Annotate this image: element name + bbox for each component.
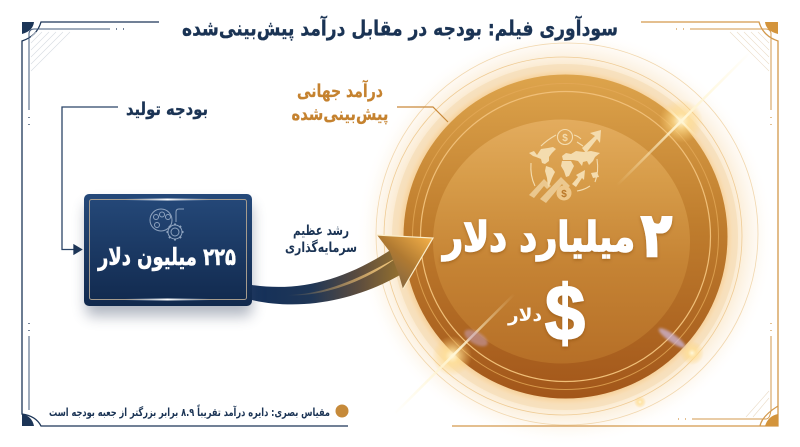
footnote	[49, 404, 348, 419]
legend dot	[336, 404, 348, 418]
outer rings	[376, 43, 758, 425]
australia	[591, 172, 599, 178]
flare bottom spark	[634, 396, 646, 408]
growth arrow small	[572, 170, 585, 187]
revenue amount	[441, 200, 672, 271]
africa	[561, 161, 574, 177]
icon: film reel and gear	[150, 209, 184, 240]
lens flares	[393, 50, 752, 415]
coin body	[404, 74, 728, 398]
budget box	[84, 194, 252, 316]
growth arrow large	[582, 130, 601, 153]
flare top right	[616, 50, 752, 186]
digit: ۲	[641, 200, 672, 271]
eurasia	[562, 151, 600, 166]
left navy corner frame	[22, 22, 348, 426]
box shadow	[86, 204, 252, 316]
growth label	[285, 223, 357, 256]
arrow head edge	[377, 235, 433, 289]
growth arrow	[252, 235, 433, 304]
revenue circle	[356, 28, 774, 446]
revenue label: درآمد جهانی	[297, 79, 383, 102]
dollar word: دلار	[507, 305, 542, 326]
icon: dollar signs: $	[561, 189, 567, 200]
arrow shaft	[252, 249, 400, 304]
budget amount: ۲۲۵ میلیون دلار	[97, 243, 236, 271]
budget label: بودجه تولید	[126, 100, 208, 120]
unit: میلیارد دلار	[441, 213, 635, 261]
revenue label leader line	[397, 107, 448, 122]
growth label: سرمایه‌گذاری	[285, 239, 357, 256]
title: سودآوری فیلم: بودجه در مقابل درآمد پیش‌بینی‌شده	[182, 16, 618, 40]
icon: world growth	[529, 130, 601, 203]
box inner border	[90, 200, 246, 300]
dollar symbol: $	[545, 268, 585, 356]
north america	[529, 147, 556, 164]
arrow head	[377, 235, 433, 289]
flare bottom right	[657, 326, 704, 365]
growth label: رشد عظیم	[293, 223, 349, 239]
south america	[545, 166, 555, 187]
revenue label: پیش‌بینی‌شده	[292, 104, 388, 125]
right gold corner frame	[452, 22, 778, 426]
footnote text: مقیاس بصری: دایره درآمد تقریباً ۸.۹ برابر بزرگتر از جعبه بودجه است	[49, 404, 330, 419]
box body	[84, 194, 252, 306]
halo	[356, 28, 774, 446]
revenue label	[292, 79, 388, 125]
arrow streak	[285, 258, 396, 295]
budget label connector arrow	[62, 107, 118, 254]
flare bottom left	[393, 293, 515, 415]
icon: dollar signs	[561, 133, 568, 200]
growth zigzags	[529, 177, 570, 203]
icon: dollar signs: $	[562, 133, 568, 144]
